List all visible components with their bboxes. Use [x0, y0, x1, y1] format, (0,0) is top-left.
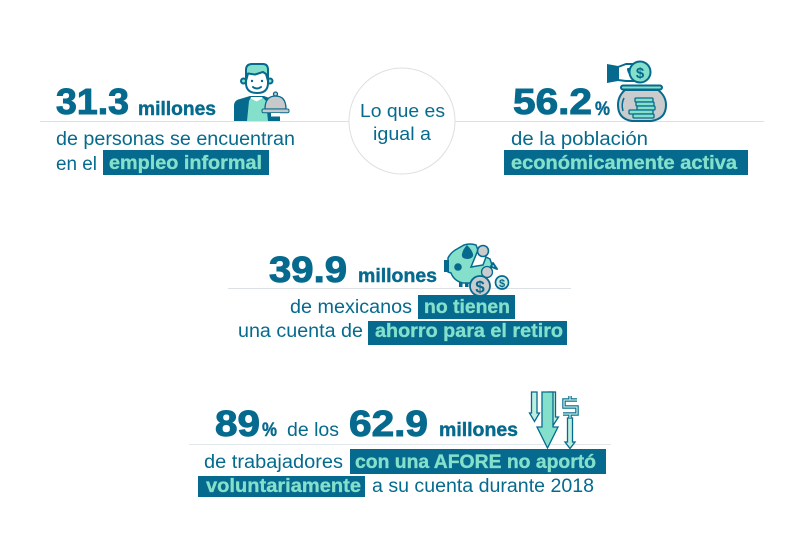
text: de los: de los — [287, 420, 339, 441]
icon: hand dropping coin — [607, 62, 650, 83]
stat: 62.9 millones: 62.9 — [349, 403, 428, 444]
stat: 39.9 millones: millones — [358, 266, 437, 287]
stat: 56.2%: % — [595, 99, 610, 120]
panel: población económicamente activa — [504, 62, 748, 175]
stat: 31.3 millones: millones — [138, 99, 216, 120]
panel: aportaciones voluntarias AFORE — [198, 392, 606, 497]
text: de trabajadores: de trabajadores — [204, 452, 343, 473]
text: una cuenta de: una cuenta de — [238, 321, 363, 342]
text: de la población: de la población — [511, 129, 648, 150]
stat: 39.9 millones — [269, 249, 437, 290]
text: de personas se encuentran en el: en el — [56, 154, 97, 175]
stat: 31.3 millones: 31.3 — [56, 81, 129, 122]
highlight: ahorro para el retiro: ahorro para el retiro — [375, 321, 563, 342]
stat: 62.9 millones: millones — [439, 420, 518, 441]
callout: Lo que es igual a: igual a — [373, 124, 432, 144]
highlight: no tienen: no tienen — [424, 297, 510, 318]
stat: 89%: % — [262, 420, 277, 441]
text: de personas se encuentran en el: de personas se encuentran — [56, 129, 295, 150]
highlight: económicamente activa: económicamente activa — [511, 153, 737, 174]
highlight: voluntariamente: voluntariamente — [206, 476, 361, 497]
icon: jar of coins — [618, 86, 666, 121]
highlight: empleo informal: empleo informal — [109, 153, 262, 174]
icon: piggy bank with coins: $ — [499, 278, 505, 290]
stat: 31.3 millones — [56, 81, 216, 122]
icon: hand dropping coin: $ — [636, 65, 645, 82]
stat: 39.9 millones: 39.9 — [269, 249, 347, 290]
stat: 89%: 89 — [215, 403, 260, 444]
stat: 62.9 millones — [349, 403, 518, 444]
panel: ahorro para el retiro — [238, 244, 567, 345]
panel: empleo informal — [56, 64, 295, 175]
text: de mexicanos: de mexicanos — [290, 297, 412, 318]
icon: piggy bank with coins — [444, 244, 508, 296]
icon: piggy bank with coins: $ — [475, 278, 485, 296]
callout: Lo que es igual a — [349, 68, 455, 174]
text: de personas se encuentran en el — [56, 129, 295, 175]
text: a su cuenta durante 2018: a su cuenta durante 2018 — [372, 476, 594, 497]
icon: waiter with cloche — [234, 64, 289, 121]
callout: Lo que es igual a: Lo que es — [360, 101, 445, 121]
icon: downward arrows and dollar sign — [530, 392, 577, 448]
highlight: con una AFORE no aportó: con una AFORE no aportó — [355, 452, 596, 473]
stat: 89% — [215, 403, 277, 444]
stat: 56.2%: 56.2 — [513, 81, 592, 122]
